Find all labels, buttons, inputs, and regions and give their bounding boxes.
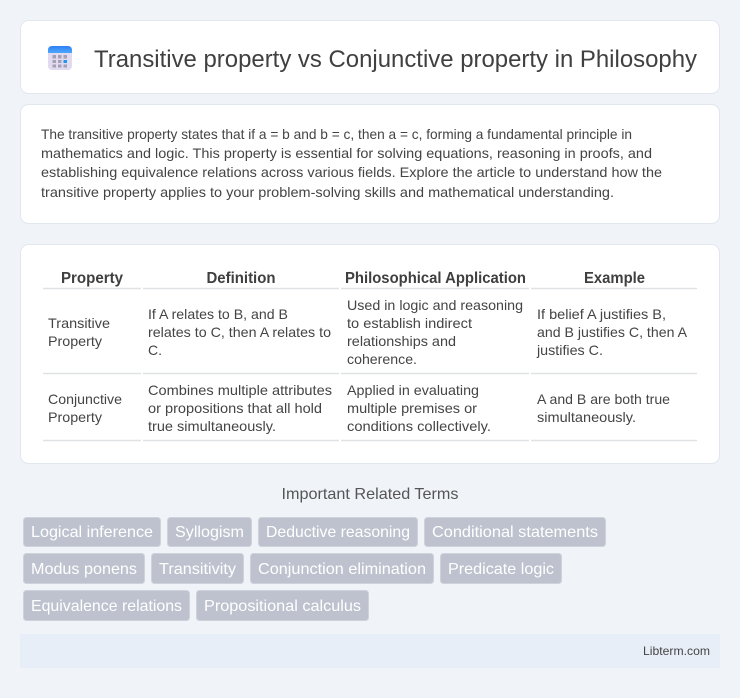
row: conjunctive property: multiple premises or <box>347 400 477 416</box>
row: transitive property: and B justifies C, then A <box>537 324 688 340</box>
title: Transitive property vs Conjunctive property in Philosophy <box>94 46 697 73</box>
panel: intro paragraph <box>20 104 720 224</box>
tags: related terms: Conjunction elimination <box>258 561 426 578</box>
row: conjunctive property: true simultaneously. <box>148 418 276 434</box>
panel: intro paragraph: mathematics and logic. This property is essential for solving equations, reasoning in proofs, and <box>41 145 652 161</box>
tags: related terms: Logical inference <box>31 524 153 541</box>
panel: intro paragraph: The transitive property states that if a = b and b = c, then a = c, forming a fundamental principle in <box>41 126 632 142</box>
tags: related terms: Propositional calculus <box>204 598 361 615</box>
table header <box>61 270 645 287</box>
tags: related terms: Predicate logic <box>448 561 554 578</box>
tags: related terms: Conditional statements <box>432 524 598 541</box>
heading: related terms: Important Related Terms <box>282 486 458 503</box>
footer: Libterm.com <box>643 644 710 658</box>
row: transitive property: C. <box>148 342 162 358</box>
row: transitive property: If A relates to B, and B <box>148 306 288 322</box>
icon: calendar <box>48 46 72 70</box>
row: conjunctive property: Property <box>48 409 102 425</box>
row: transitive property: relates to C, then A relates to <box>148 324 331 340</box>
table header: Example <box>584 270 645 287</box>
row: transitive property: to establish indirect <box>347 315 472 331</box>
table header: Definition <box>206 270 276 287</box>
row: transitive property: relationships and <box>347 333 456 349</box>
panel: comparison table <box>20 244 720 464</box>
panel: intro paragraph: establishing equivalence relations across various fields. Explore the article to understand how the <box>41 164 662 180</box>
tags: related terms: Syllogism <box>175 524 244 541</box>
tags: related terms <box>24 518 606 620</box>
table header: Property <box>61 270 123 287</box>
row: transitive property: Property <box>48 333 102 349</box>
footer <box>20 634 720 668</box>
row: transitive property: If belief A justifies B, <box>537 306 666 322</box>
row: conjunctive property: Conjunctive <box>48 391 122 407</box>
row: transitive property: coherence. <box>347 351 417 367</box>
row: transitive property: justifies C. <box>536 342 603 358</box>
row: conjunctive property: Combines multiple attributes <box>148 382 332 398</box>
row: conjunctive property: or propositions that all hold <box>148 400 322 416</box>
tags: related terms: Deductive reasoning <box>266 524 410 541</box>
row: conjunctive property: simultaneously. <box>537 409 636 425</box>
table header: Philosophical Application <box>345 270 526 287</box>
row: conjunctive property <box>48 382 670 434</box>
panel: intro paragraph: transitive property applies to your problem-solving skills and mathematical understanding. <box>41 184 614 200</box>
row: transitive property <box>48 297 688 367</box>
tags: related terms: Transitivity <box>159 561 236 578</box>
header panel <box>20 20 720 94</box>
row: transitive property: Used in logic and reasoning <box>347 297 523 313</box>
row: conjunctive property: A and B are both true <box>537 391 670 407</box>
tags: related terms: Modus ponens <box>31 561 137 578</box>
tags: related terms: Equivalence relations <box>31 598 182 615</box>
row: conjunctive property: conditions collectively. <box>347 418 491 434</box>
row: transitive property: Transitive <box>48 315 110 331</box>
row: conjunctive property: Applied in evaluating <box>347 382 479 398</box>
